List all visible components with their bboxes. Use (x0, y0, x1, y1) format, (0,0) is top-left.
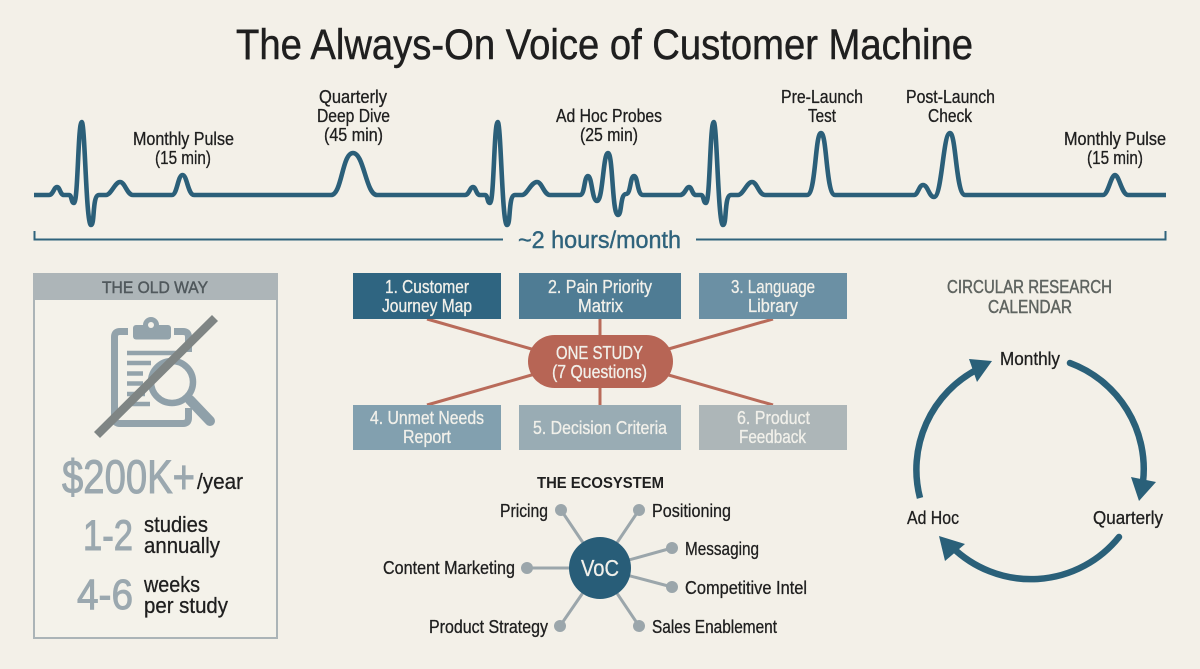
timeline labels: (25 min) (580, 125, 638, 145)
chart: heartbeat timeline (34, 87, 1166, 254)
stat: annual cost: /year (197, 469, 243, 494)
timeline labels: Test (808, 106, 836, 126)
box 6: Feedback (739, 427, 807, 447)
box 5: 5. Decision Criteria (533, 418, 668, 438)
arrow: quarterly to ad hoc (939, 536, 1119, 579)
stat: annual cost: $200K+ (62, 450, 195, 503)
central pill: (7 Questions) (552, 362, 647, 382)
stat: weeks per study (77, 571, 228, 619)
box 3: 3. Language (731, 277, 815, 297)
time bracket (34, 231, 1166, 240)
ecosystem heading: THE ECOSYSTEM (537, 475, 664, 492)
box 6: 6. Product (737, 408, 810, 428)
central pill (528, 335, 673, 388)
timeline labels: Pre-Launch (781, 87, 863, 107)
central pill: ONE STUDY (556, 343, 643, 363)
box 6 (699, 405, 847, 450)
calendar labels: Quarterly (1093, 508, 1163, 528)
timeline labels (133, 87, 1166, 168)
bracket label: ~2 hours/month (518, 227, 681, 254)
timeline labels: Monthly Pulse (133, 129, 234, 149)
box 4: 4. Unmet Needs (370, 408, 484, 428)
box 1: 1. Customer (385, 277, 469, 297)
box 1: Journey Map (382, 296, 472, 316)
panel: the old way (33, 273, 278, 638)
panel header (33, 273, 278, 300)
box 2 (519, 273, 681, 319)
title: The Always-On Voice of Customer Machine (236, 21, 973, 69)
timeline labels: Monthly Pulse (1064, 129, 1166, 149)
stat: studies annually (83, 512, 220, 560)
box 2: Matrix (578, 296, 623, 316)
hub (569, 537, 631, 599)
timeline labels: Ad Hoc Probes (556, 106, 662, 126)
ecosystem labels (383, 501, 807, 637)
timeline labels: (15 min) (1087, 148, 1143, 168)
calendar heading: CIRCULAR RESEARCH (947, 277, 1112, 297)
spokes and nodes (521, 504, 678, 632)
calendar heading (947, 277, 1112, 317)
diagram: the ecosystem (383, 475, 807, 637)
box 4 (353, 405, 501, 450)
connector lines (427, 319, 773, 405)
timeline labels: (15 min) (155, 148, 211, 168)
stat: studies annually: 1-2 (83, 512, 133, 560)
ecosystem labels: Pricing (500, 501, 548, 521)
panel heading: THE OLD WAY (102, 278, 208, 297)
timeline labels: Post-Launch (906, 87, 995, 107)
ecosystem labels: Sales Enablement (652, 617, 777, 637)
box 1 (353, 273, 501, 319)
timeline labels: (45 min) (324, 125, 383, 145)
arrow: ad hoc to monthly (916, 359, 992, 498)
stat: studies annually: annually (144, 533, 220, 558)
calendar labels: Ad Hoc (907, 508, 959, 528)
diagram: one study outputs (353, 273, 847, 450)
ecosystem labels: Product Strategy (429, 617, 548, 637)
stat: studies annually: studies (144, 512, 208, 537)
ecosystem labels: Competitive Intel (685, 578, 807, 598)
box 4: Report (403, 427, 451, 447)
diagram: circular research calendar (907, 277, 1163, 579)
box 3: Library (748, 296, 798, 316)
calendar labels (907, 349, 1163, 528)
calendar heading: CALENDAR (988, 297, 1072, 317)
box 5 (519, 405, 681, 450)
ecosystem labels: Positioning (652, 501, 731, 521)
timeline labels: Check (928, 106, 973, 126)
timeline labels: Quarterly (319, 87, 387, 107)
heartbeat line (34, 122, 1166, 225)
stat: weeks per study: 4-6 (77, 571, 133, 619)
stat: weeks per study: per study (144, 593, 228, 618)
ecosystem labels: Messaging (685, 539, 759, 559)
timeline labels: Deep Dive (317, 106, 390, 126)
arrow: monthly to quarterly (1070, 363, 1156, 501)
calendar labels: Monthly (1000, 349, 1060, 369)
box 2: 2. Pain Priority (548, 277, 652, 297)
hub: VoC (581, 555, 619, 581)
ecosystem labels: Content Marketing (383, 558, 515, 578)
icon: crossed-out clipboard and magnifier (97, 317, 215, 435)
stat: weeks per study: weeks (143, 572, 200, 597)
box 3 (699, 273, 847, 319)
